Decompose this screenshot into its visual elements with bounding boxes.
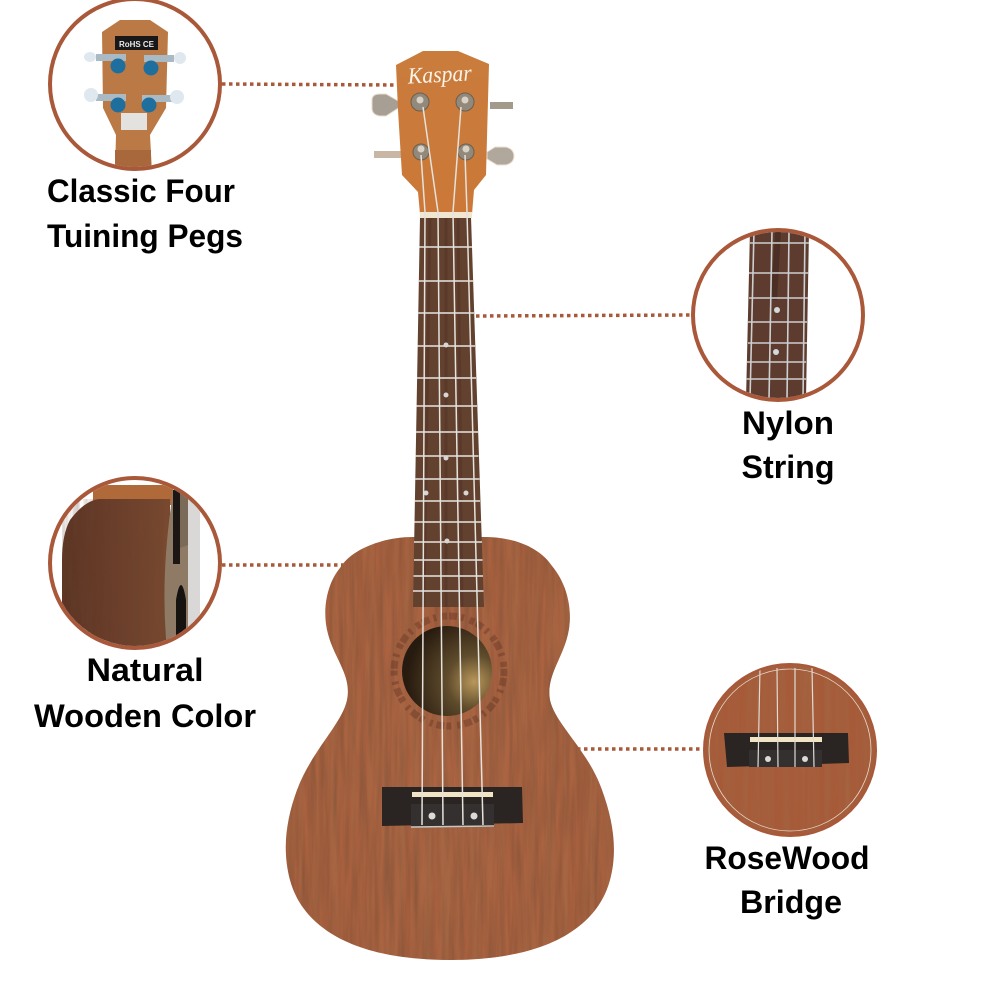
body bbox=[280, 530, 620, 965]
strings bbox=[421, 107, 483, 825]
callout: rosewood bridge photo bbox=[703, 663, 877, 837]
label: natural wood: Natural bbox=[86, 652, 204, 688]
bridge bbox=[382, 787, 523, 827]
connector: rosewood bridge bbox=[570, 747, 703, 751]
tuning pegs on headstock bbox=[411, 93, 474, 160]
label: rosewood bridge bbox=[704, 840, 870, 920]
fretboard bbox=[413, 217, 484, 607]
label: natural wood: Wooden Color bbox=[34, 698, 256, 734]
brand logo: Kaspar bbox=[406, 60, 473, 89]
label: tuning pegs bbox=[47, 173, 243, 254]
label: rosewood bridge: RoseWood bbox=[704, 840, 870, 876]
connector: nylon string bbox=[476, 315, 692, 316]
label: nylon string: String bbox=[742, 449, 834, 485]
rosette bbox=[394, 616, 504, 726]
callout: nylon string photo bbox=[693, 230, 863, 400]
sound hole bbox=[402, 626, 492, 716]
callout: natural wood photo bbox=[50, 478, 220, 650]
connector: tuning pegs bbox=[222, 84, 396, 85]
callout: tuning pegs photo bbox=[50, 0, 220, 172]
label: nylon string bbox=[742, 405, 834, 485]
label: tuning pegs: Tuining Pegs bbox=[47, 218, 243, 254]
tuning machine hardware bbox=[372, 94, 514, 165]
connector: natural wood bbox=[222, 563, 343, 567]
headstock bbox=[396, 51, 489, 214]
label: rosewood bridge: Bridge bbox=[740, 884, 842, 920]
label: natural wood bbox=[34, 652, 256, 734]
ukulele illustration bbox=[280, 51, 620, 965]
nut bbox=[420, 212, 472, 218]
label: nylon string: Nylon bbox=[742, 405, 834, 441]
label: tuning pegs: Classic Four bbox=[47, 173, 235, 209]
callout: tuning pegs photo: RoHS CE bbox=[119, 40, 155, 49]
